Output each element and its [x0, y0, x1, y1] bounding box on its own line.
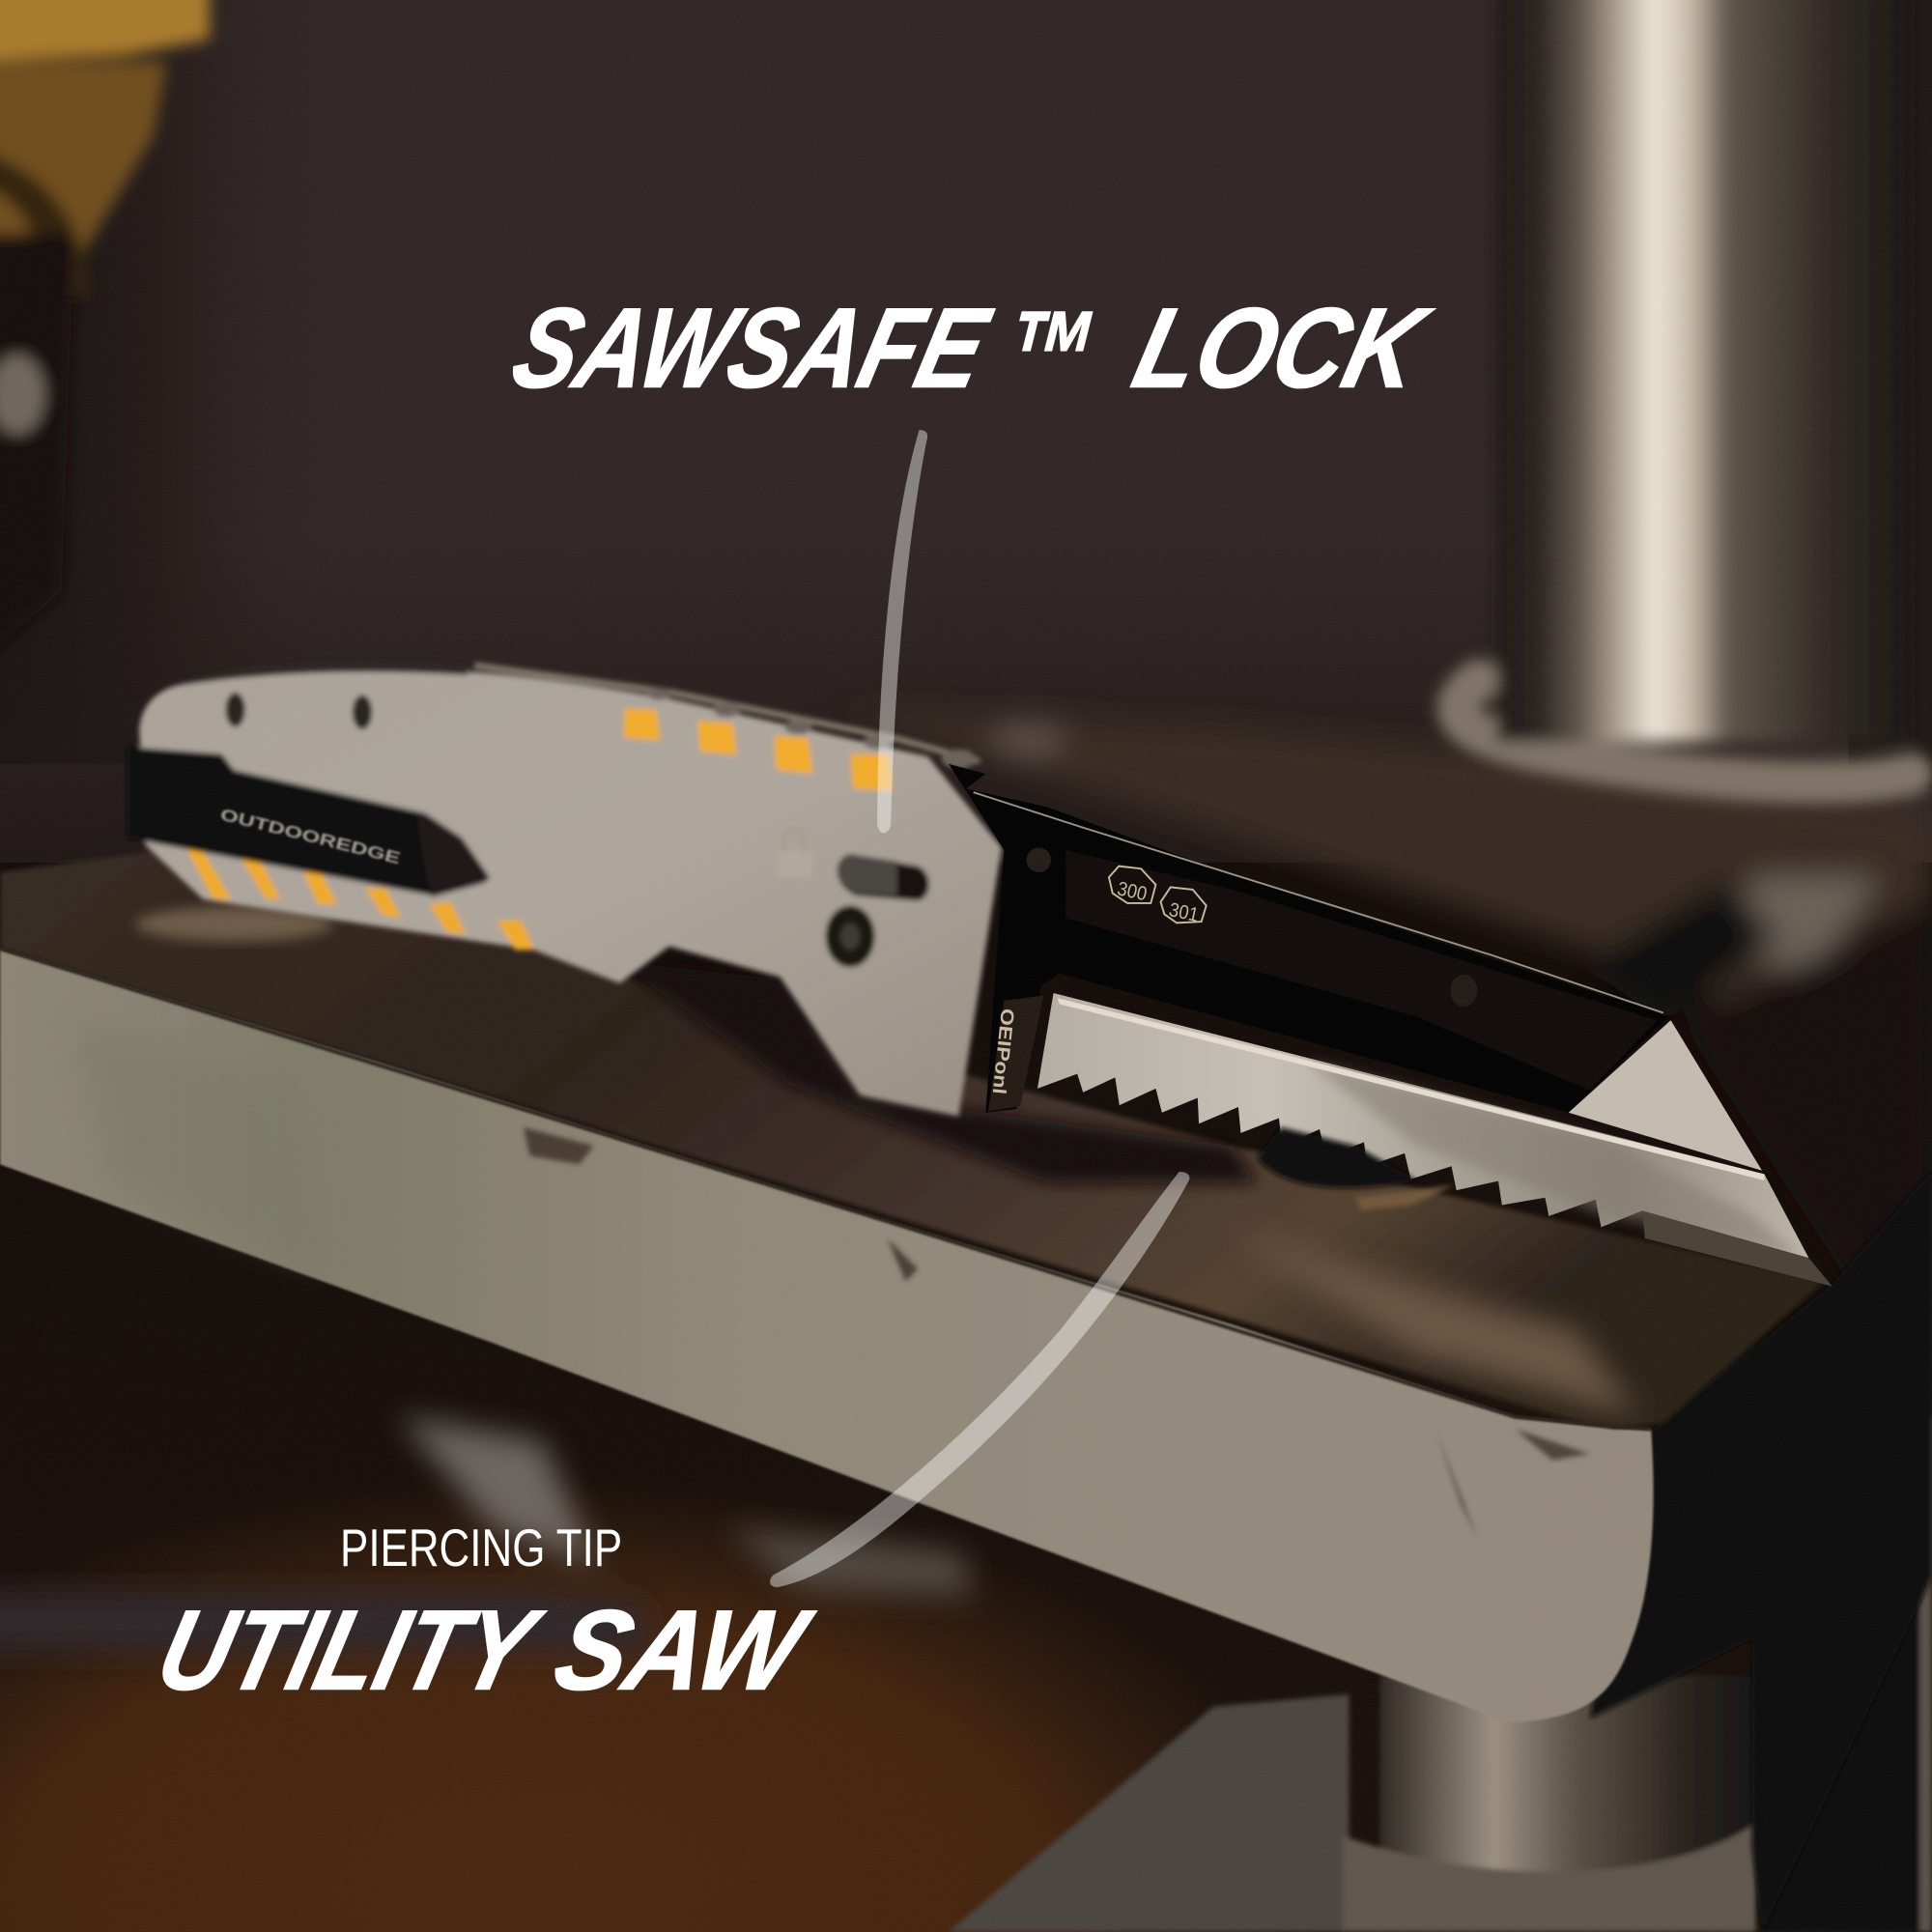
hole shadow under saw [1257, 1127, 1417, 1188]
yellow markers: top row [623, 708, 892, 791]
label: piercing tip: PIERCING TIP [340, 1518, 622, 1577]
heading: SawSafe Lock: SAWSAFE [501, 285, 1002, 412]
blade markings 300 301: 301 [1167, 899, 1201, 926]
blade markings 300 301 [1109, 867, 1207, 926]
heading: SawSafe Lock: LOCK [1122, 285, 1441, 412]
lock icon [778, 850, 812, 877]
black blade [949, 764, 1668, 1113]
heading: SawSafe Lock: ™ [986, 286, 1107, 423]
pointer: SawSafe Lock [877, 430, 927, 833]
lower column and floor [949, 1417, 1932, 1932]
bench front face [0, 949, 1654, 1722]
blade markings 300 301: 300 [1116, 878, 1149, 905]
heading: utility saw: UTILITY [147, 1587, 554, 1714]
heading: SawSafe Lock [501, 285, 1441, 423]
heading: utility saw [147, 1587, 823, 1714]
drill press column [1458, 0, 1913, 782]
handle lower brand tag: OEIPonl [988, 1008, 1017, 1095]
pointer: utility saw [770, 1172, 1189, 1587]
bench dark right flank [1589, 1171, 1932, 1932]
yellow markers: lower stripes [186, 848, 535, 950]
pocket clip [127, 747, 491, 895]
bench top surface [0, 850, 1824, 1430]
serrated saw blade [1037, 993, 1808, 1258]
tip bevel [1642, 1212, 1833, 1287]
handle lower brand tag [988, 996, 1043, 1112]
slider button [837, 854, 929, 900]
knife [127, 661, 1833, 1287]
saw ridge highlight [1057, 998, 1765, 1180]
piercing tip [1569, 1020, 1762, 1171]
heading: utility saw: SAW [543, 1587, 823, 1714]
back table [838, 708, 1932, 1417]
clip wordmark: OUTDOOREDGE [218, 805, 403, 867]
knife handle [127, 661, 1002, 1117]
pivot screw [826, 906, 875, 967]
